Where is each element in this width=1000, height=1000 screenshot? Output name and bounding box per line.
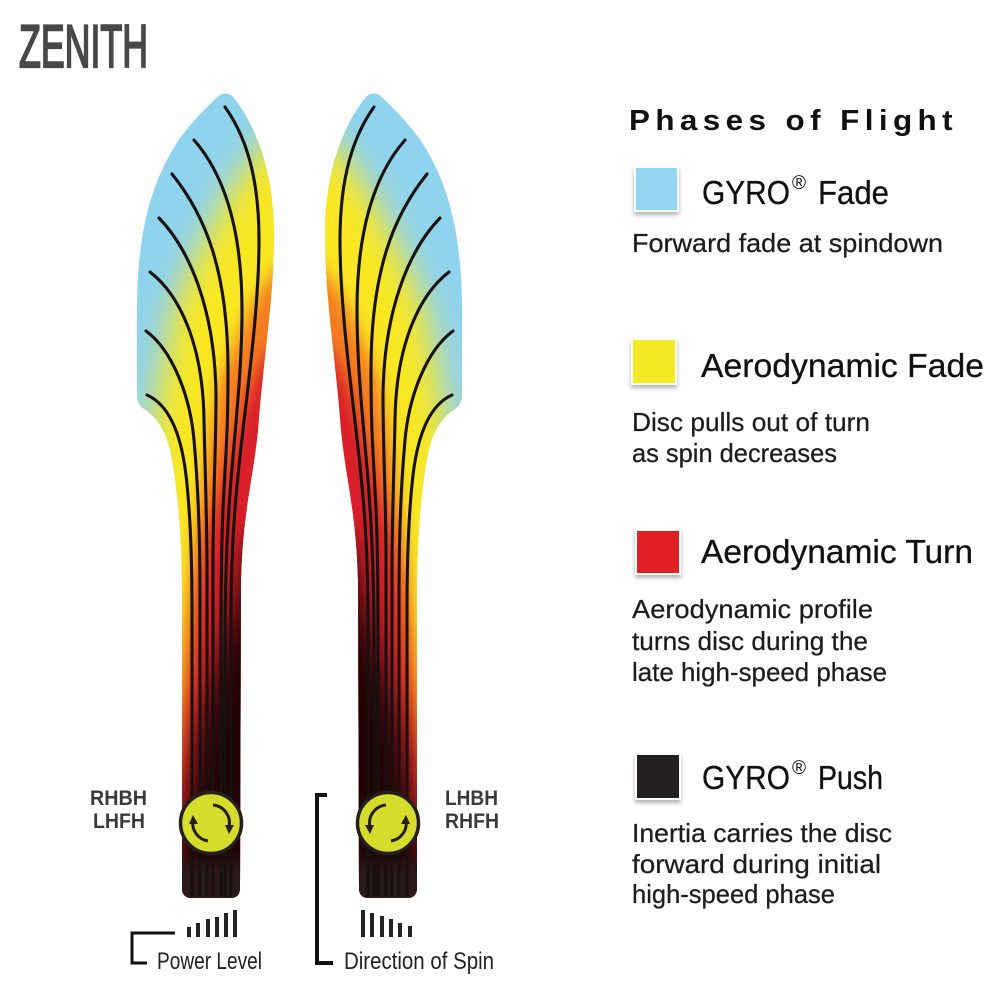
- legend item: gyro fade: GYRO: [702, 174, 790, 211]
- power level label: Power Level: [157, 948, 262, 975]
- spin direction bars: [361, 910, 412, 937]
- legend item: aerodynamic turn: [632, 529, 973, 687]
- label: left throw types: LHFH: [93, 810, 145, 833]
- legend item: aerodynamic turn: late high-speed phase: [632, 657, 887, 687]
- legend item: aerodynamic fade: Disc pulls out of turn: [632, 407, 870, 437]
- legend item: gyro push: ®: [792, 758, 806, 779]
- power level bracket: [132, 933, 175, 963]
- legend item: gyro push: high-speed phase: [632, 879, 835, 909]
- legend item: gyro fade: ®: [792, 173, 806, 194]
- legend item: gyro push: Inertia carries the disc: [632, 818, 892, 848]
- legend item: aerodynamic turn: Aerodynamic profile: [632, 594, 873, 624]
- legend item: aerodynamic fade: Aerodynamic Fade: [701, 347, 984, 384]
- label: right throw types: RHFH: [445, 810, 499, 833]
- label: left throw types: [90, 787, 147, 833]
- spin direction label: Direction of Spin: [344, 948, 494, 975]
- legend item: gyro fade: [632, 166, 943, 258]
- title: ZENITH: [19, 13, 148, 80]
- power level bars: [187, 910, 237, 937]
- spin direction bracket: [317, 795, 333, 963]
- label: right throw types: [445, 787, 499, 833]
- legend item: aerodynamic turn: turns disc during the: [632, 626, 868, 656]
- legend item: gyro fade: Fade: [818, 174, 889, 211]
- legend item: gyro push: GYRO: [702, 759, 790, 796]
- legend item: aerodynamic fade: as spin decreases: [632, 438, 837, 468]
- label: right throw types: LHBH: [445, 787, 498, 810]
- legend item: gyro fade: Forward fade at spindown: [632, 228, 943, 258]
- right flight chart: [269, 80, 479, 922]
- legend item: gyro push: forward during initial: [632, 849, 881, 879]
- left flight chart: [120, 80, 330, 922]
- label: left throw types: RHBH: [90, 787, 147, 810]
- legend item: aerodynamic turn: Aerodynamic Turn: [701, 533, 973, 570]
- legend item: gyro push: [632, 753, 892, 909]
- legend item: gyro push: Push: [818, 759, 883, 796]
- legend heading: Phases of Flight: [629, 105, 958, 137]
- legend item: aerodynamic fade: [631, 338, 984, 468]
